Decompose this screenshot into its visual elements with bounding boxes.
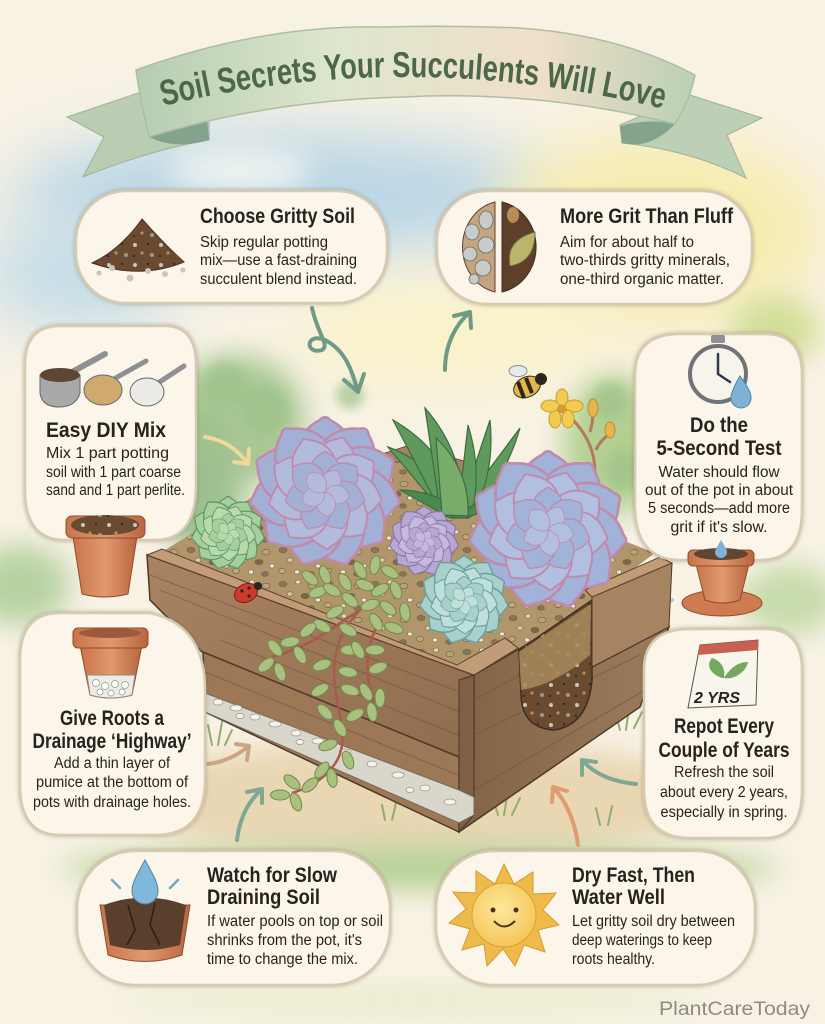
- heading: Easy DIY Mix: [46, 419, 166, 442]
- planter: [147, 445, 672, 832]
- card: choose gritty soil: [76, 191, 387, 303]
- body: [660, 764, 788, 821]
- icon: pot with pumice: [73, 628, 148, 698]
- right fold: [620, 121, 675, 144]
- icon: stopwatch and drop: [690, 335, 751, 408]
- body: soil with 1 part coarse: [46, 464, 181, 481]
- card: dry fast: [436, 851, 755, 985]
- heading: 5-Second Test: [656, 437, 782, 460]
- body: [33, 755, 191, 811]
- card: repot: [644, 629, 802, 838]
- heading: More Grit Than Fluff: [560, 205, 734, 228]
- body: [572, 913, 735, 968]
- body: [645, 464, 794, 536]
- ladybug: [231, 580, 262, 606]
- arrow: from slow drainage: [237, 789, 262, 840]
- body: shrinks from the pot, it's: [207, 932, 362, 949]
- body: [46, 445, 185, 499]
- body: [200, 234, 357, 288]
- icon: soil comparison: [463, 202, 536, 292]
- body: Skip regular potting: [200, 234, 328, 251]
- icon: measuring scoops: [40, 354, 184, 407]
- watermark: PlantCareToday: [659, 999, 811, 1020]
- body: Aim for about half to: [560, 234, 694, 251]
- heading: Do the: [690, 414, 748, 437]
- heading: Watch for Slow: [207, 864, 338, 887]
- body: two-thirds gritty minerals,: [560, 252, 730, 269]
- arrow: from DIY mix: [205, 437, 249, 464]
- body: out of the pot in about: [645, 482, 794, 499]
- icon: soil pile: [92, 219, 186, 282]
- card: drainage highway: [20, 613, 205, 835]
- arrow: from repot: [582, 760, 636, 784]
- title text: Soil Secrets Your Succulents Will Love: [160, 52, 665, 108]
- body: Add a thin layer of: [54, 755, 171, 772]
- corner post: [459, 675, 474, 832]
- ribbon band: [136, 26, 695, 137]
- body: 5 seconds—add more: [648, 500, 790, 517]
- heading: Give Roots a: [60, 707, 164, 730]
- bee: [509, 366, 547, 402]
- arrow: from drainage: [208, 744, 249, 764]
- left fold: [149, 118, 209, 144]
- body: time to change the mix.: [207, 951, 358, 968]
- yellow flower: [541, 389, 583, 428]
- body: [207, 913, 383, 968]
- heading: Water Well: [572, 886, 665, 909]
- icon: pot draining on saucer: [682, 540, 762, 616]
- front rim: [147, 549, 518, 675]
- heading: [658, 715, 790, 762]
- front face upper board: [147, 555, 474, 760]
- string of pearls: [256, 555, 412, 813]
- icon: terracotta pot with soil: [66, 515, 145, 597]
- body: grit if it's slow.: [670, 519, 768, 536]
- succulent: large blue right: [464, 448, 632, 614]
- body: Let gritty soil dry between: [572, 913, 735, 930]
- body: sand and 1 part perlite.: [46, 482, 185, 499]
- grass tufts: [208, 700, 642, 825]
- heading: [32, 707, 192, 753]
- flower stem: [541, 389, 615, 495]
- wood grain: [150, 575, 668, 790]
- card: easy DIY mix: [25, 326, 196, 540]
- arrow: to more grit: [445, 312, 471, 370]
- succulent: large blue left: [245, 414, 405, 572]
- body: Mix 1 part potting: [46, 445, 169, 462]
- icon: calendar: [688, 640, 758, 708]
- succulent: small purple: [387, 505, 461, 578]
- heading: Couple of Years: [658, 739, 790, 762]
- title banner: [66, 26, 764, 179]
- aloe: [388, 408, 520, 518]
- heading: Drainage ‘Highway’: [32, 730, 192, 753]
- body: pumice at the bottom of: [36, 774, 189, 791]
- icon: smiling sun: [449, 864, 559, 966]
- heading: [656, 414, 782, 460]
- heading: Draining Soil: [207, 886, 320, 909]
- body: Water should flow: [658, 464, 780, 481]
- succulent: small green: [189, 495, 267, 572]
- body: succulent blend instead.: [200, 271, 357, 288]
- heading: [207, 864, 338, 909]
- arrow: to cutaway: [615, 597, 672, 615]
- heading: [572, 864, 695, 909]
- front face lower board: [203, 652, 459, 832]
- body: mix—use a fast-draining: [200, 252, 357, 269]
- body: Refresh the soil: [674, 764, 774, 781]
- arrow: from dry fast: [552, 787, 578, 845]
- arrow: from gritty soil: [310, 308, 364, 392]
- pumice layer: [205, 693, 474, 823]
- heading: Choose Gritty Soil: [200, 205, 355, 228]
- right face: [459, 607, 669, 832]
- body: one-third organic matter.: [560, 271, 724, 288]
- gravel soil surface: [165, 460, 655, 672]
- icon: cracked soil and drop: [100, 860, 190, 962]
- body: especially in spring.: [660, 804, 788, 821]
- arrows between cards and planter: [205, 308, 672, 845]
- body: [560, 234, 730, 288]
- heading: Dry Fast, Then: [572, 864, 695, 887]
- body: deep waterings to keep: [572, 932, 712, 949]
- card: 5-second test: [635, 334, 802, 560]
- right corner post: [592, 563, 672, 667]
- body: pots with drainage holes.: [33, 794, 191, 811]
- body: If water pools on top or soil: [207, 913, 383, 930]
- cutaway soil profile: [519, 600, 592, 730]
- back rim: [370, 445, 510, 490]
- heading: Repot Every: [674, 715, 774, 738]
- body: about every 2 years,: [660, 784, 788, 801]
- right ribbon tail: [620, 95, 762, 178]
- body: roots healthy.: [572, 951, 655, 968]
- icon: calendar: 2 YRS: [693, 690, 740, 707]
- card: more grit than fluff: [437, 191, 752, 304]
- succulent: small teal: [417, 554, 511, 647]
- left ribbon tail: [67, 93, 209, 177]
- card: slow draining soil: [77, 851, 390, 985]
